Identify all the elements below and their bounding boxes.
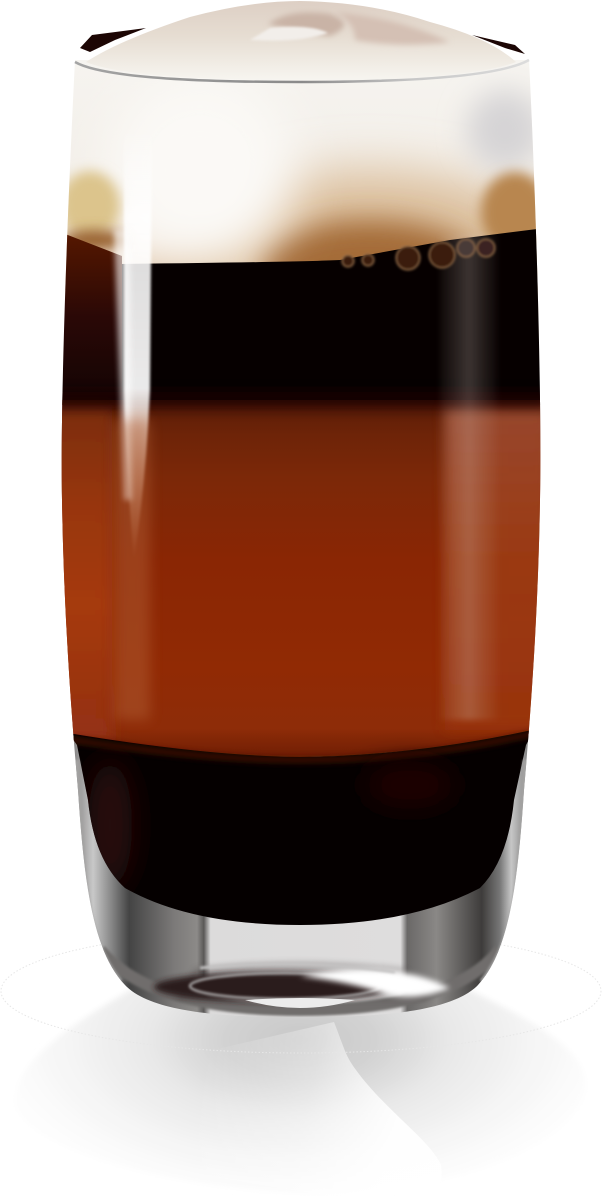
dotted ground ellipse — [1, 929, 601, 1053]
foam warm tan under arc — [248, 202, 480, 262]
light lens at bottom — [245, 998, 355, 1008]
dark lower layer — [73, 730, 529, 925]
brown shade of lower right — [365, 765, 455, 805]
bubbles — [342, 239, 495, 270]
dark wedges behind the foam — [80, 28, 525, 54]
red middle layer — [50, 400, 550, 757]
left wide soft red highlight — [114, 420, 150, 720]
base floor gradient — [175, 962, 430, 1000]
dark ellipse in base — [154, 972, 390, 1002]
foam right tan — [481, 172, 549, 252]
foam light streak — [250, 27, 328, 41]
floor shadow — [1, 929, 601, 1196]
ring highlight in base — [190, 973, 380, 999]
right lighter panel — [445, 405, 550, 730]
brown shade of lower left — [88, 760, 132, 890]
foam swirl — [268, 12, 344, 36]
foam left brown — [63, 230, 127, 250]
white base highlight — [300, 969, 450, 997]
dark upper layer — [120, 228, 545, 405]
foam column — [55, 55, 550, 290]
right vertical reflection — [440, 235, 498, 720]
glass rim — [75, 60, 529, 82]
left dark-red upper layer — [62, 234, 122, 405]
liquid contents — [50, 228, 550, 940]
base upper band — [200, 964, 395, 972]
glass wall and base — [73, 735, 528, 1017]
left highlight soft side — [114, 230, 132, 500]
left lighter panel — [62, 402, 114, 740]
left vertical highlight — [124, 130, 152, 560]
foam dome — [86, 1, 516, 80]
glass body with contents — [50, 55, 565, 1030]
foam right grey — [467, 90, 543, 170]
soft top of lower layer — [60, 732, 540, 760]
side glass strips — [76, 760, 120, 982]
foam bright core — [115, 106, 318, 264]
foam warm wash — [187, 142, 539, 336]
foam fold — [335, 12, 450, 45]
soft layer transition — [50, 392, 550, 408]
white swoosh in shadow — [170, 1022, 442, 1196]
outer steel rim at base — [100, 950, 500, 1010]
foam left yellow — [60, 171, 120, 239]
